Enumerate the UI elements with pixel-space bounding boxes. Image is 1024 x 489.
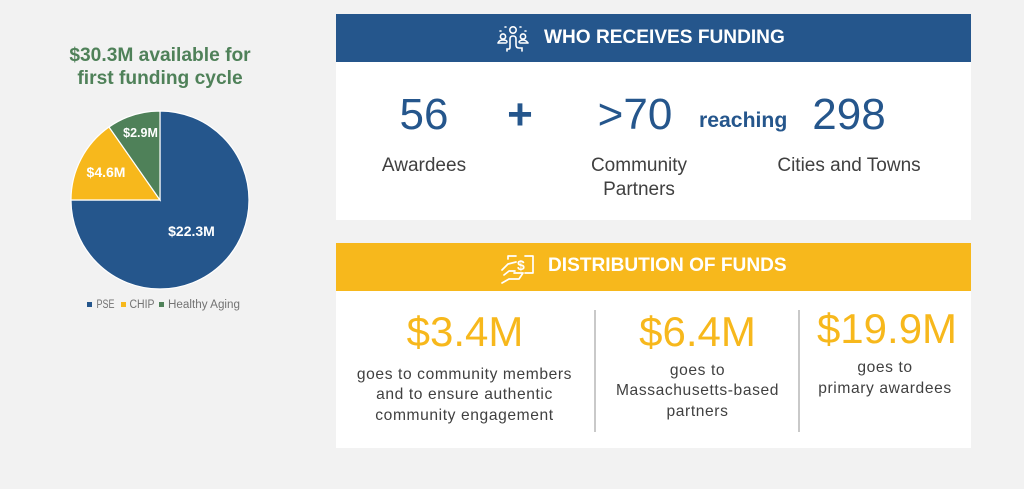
stat: 3.4M community: community engagement xyxy=(375,406,554,424)
icon: people network xyxy=(497,26,529,52)
legend: PSE xyxy=(96,299,115,311)
divider xyxy=(594,310,596,432)
pie chart title xyxy=(69,45,251,89)
slice labels: $22.3M xyxy=(168,223,215,239)
stat: 3.4M community: $3.4M xyxy=(407,308,523,355)
panel: who receives funding xyxy=(336,14,971,220)
stat: 298 cities and towns: Cities and Towns xyxy=(777,155,921,176)
legend: Healthy Aging xyxy=(168,299,240,311)
legend: CHIP xyxy=(130,299,155,311)
header band xyxy=(336,243,971,291)
stat: 56 awardees: 56 xyxy=(400,90,448,139)
header band xyxy=(336,14,971,62)
stat: over 70 community partners: Community xyxy=(591,155,687,176)
icon: hand with money: $ xyxy=(517,257,525,273)
stat: 3.4M community: and to ensure authentic xyxy=(376,386,553,403)
stat: 56 awardees xyxy=(382,90,466,176)
pie chart xyxy=(70,110,250,290)
stat: 19.9M primary awardees: primary awardees xyxy=(818,380,952,396)
slice labels xyxy=(87,126,215,239)
slice: CHIP xyxy=(71,127,160,200)
icon: hand with money xyxy=(501,255,534,284)
stat: 3.4M community: goes to community members xyxy=(357,366,572,382)
panel: distribution of funds xyxy=(336,243,971,448)
stat: 19.9M primary awardees: $19.9M xyxy=(817,305,957,352)
stat: 3.4M community xyxy=(357,308,572,424)
stat: 6.4M partners: $6.4M xyxy=(639,308,756,355)
stat: 6.4M partners xyxy=(616,308,779,420)
slice: Healthy Aging xyxy=(109,111,160,200)
stat: 6.4M partners: Massachusetts-based xyxy=(616,382,779,399)
stat: 298 cities and towns xyxy=(777,90,921,176)
plus sign: + xyxy=(507,90,533,139)
stat: over 70 community partners: >70 xyxy=(598,90,672,139)
connector word: reaching: reaching xyxy=(699,109,787,132)
stat: over 70 community partners xyxy=(591,90,687,200)
stat: 19.9M primary awardees xyxy=(817,305,957,396)
stat: 19.9M primary awardees: goes to xyxy=(857,359,913,376)
heading: who receives funding: WHO RECEIVES FUNDING xyxy=(544,27,785,48)
slice: PSE xyxy=(71,111,249,289)
pie chart title: first funding cycle xyxy=(77,68,243,89)
pie chart title: $30.3M available for xyxy=(69,45,251,66)
slice labels: $4.6M xyxy=(87,164,125,180)
divider xyxy=(798,310,800,432)
stat: 298 cities and towns: 298 xyxy=(812,90,886,139)
legend xyxy=(87,299,240,311)
slice labels: $2.9M xyxy=(123,126,158,140)
heading: distribution of funds: DISTRIBUTION OF FUNDS xyxy=(548,255,787,276)
stat: 56 awardees: Awardees xyxy=(382,155,466,176)
stat: 6.4M partners: goes to xyxy=(670,362,725,378)
stat: over 70 community partners: Partners xyxy=(603,179,675,200)
stat: 6.4M partners: partners xyxy=(666,402,728,420)
